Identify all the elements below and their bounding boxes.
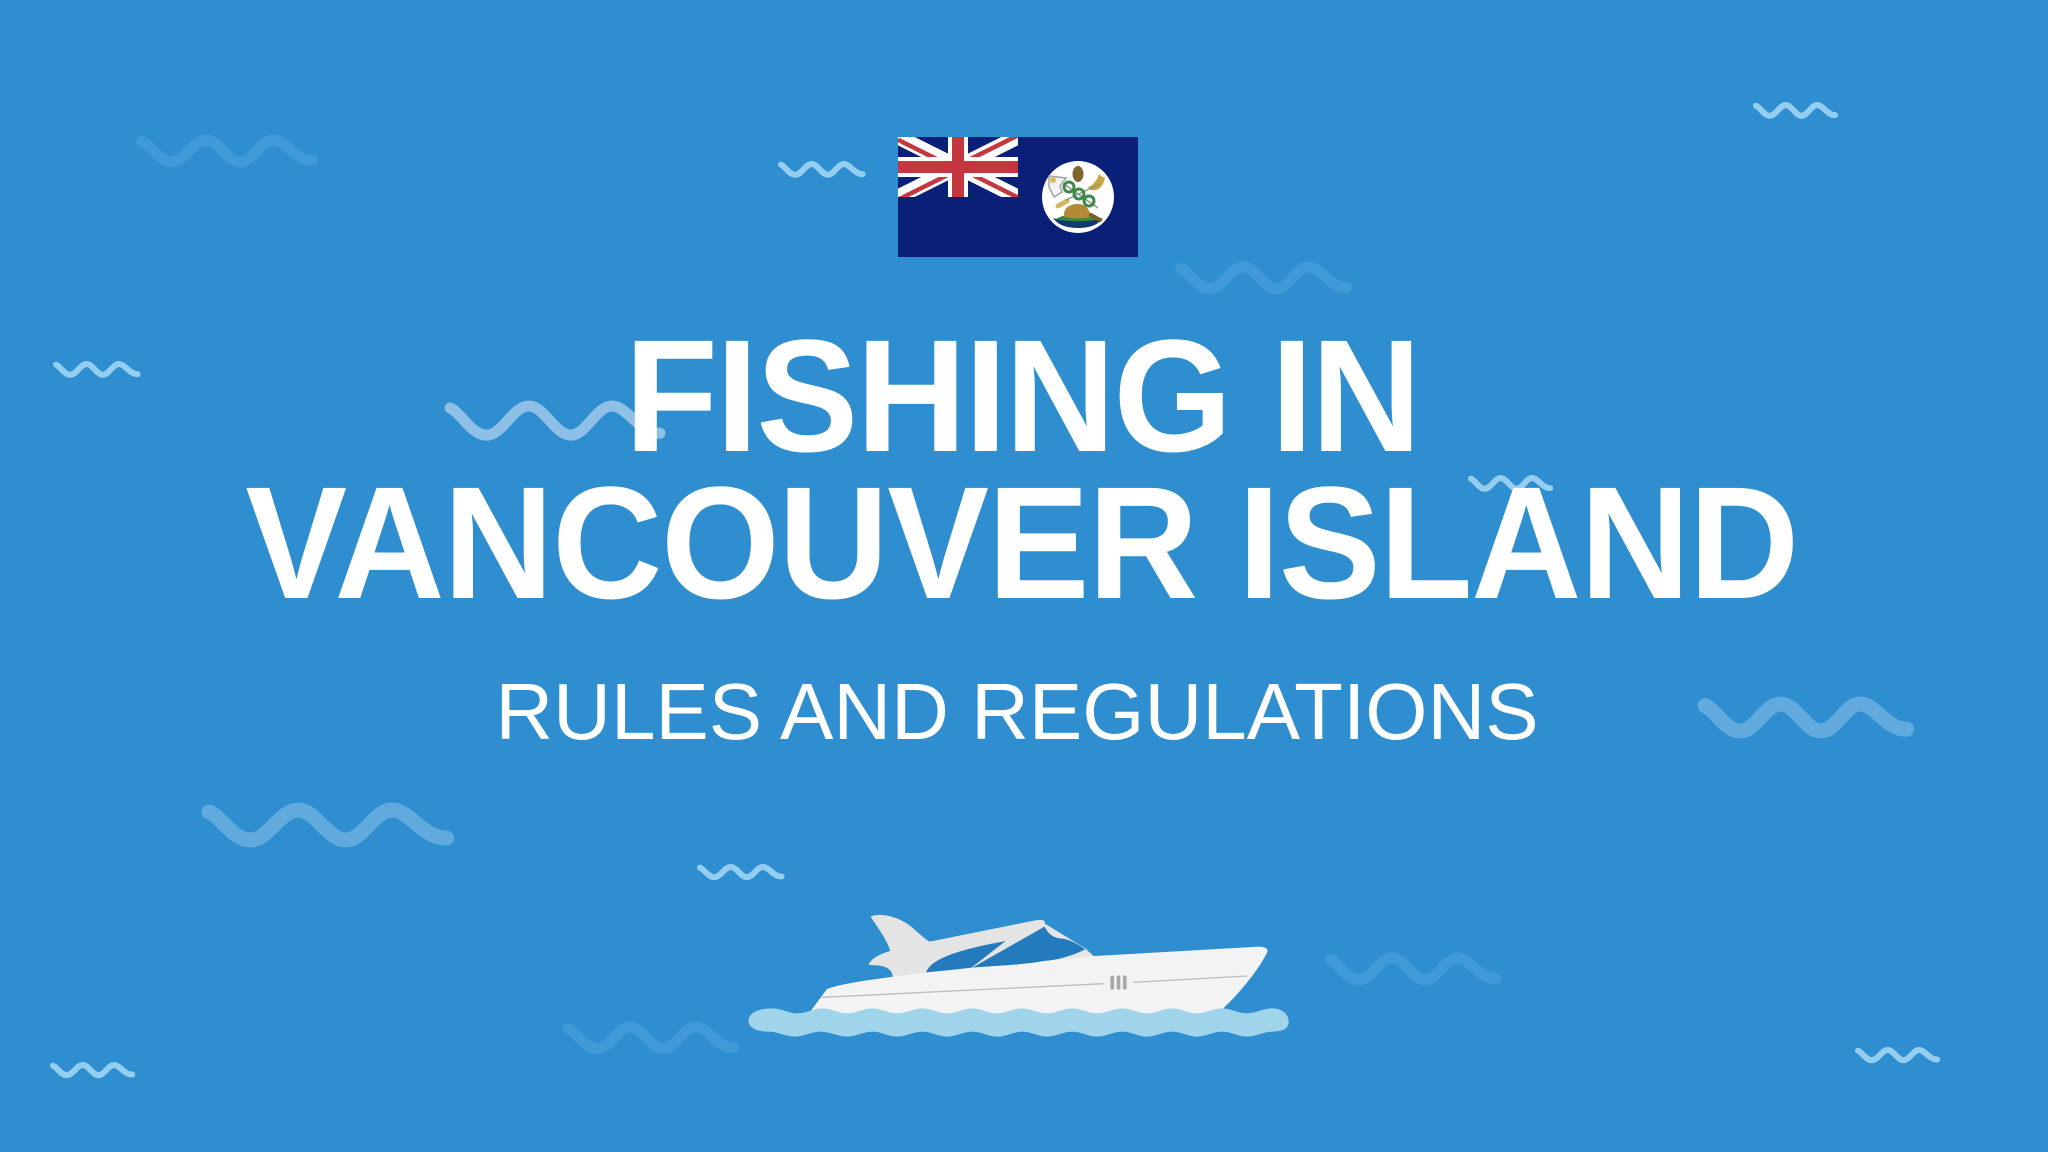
- wave: small bottom right: [1858, 1050, 1937, 1060]
- wave: small behind title right: [1471, 478, 1550, 489]
- water band: [748, 1008, 1289, 1037]
- boat arch and fin: [869, 915, 1096, 978]
- title: VANCOUVER ISLAND: [245, 454, 1798, 633]
- wave: small lower centre: [700, 867, 782, 877]
- wave: medium lower left: [209, 810, 447, 840]
- hull stripe: [822, 976, 1247, 997]
- flag of British Columbia colony: [898, 135, 1138, 257]
- subtitle: RULES AND REGULATIONS: [495, 667, 1539, 756]
- icon: union jack: [898, 135, 1018, 200]
- wave: small left: [56, 364, 138, 375]
- title: FISHING IN: [625, 307, 1419, 486]
- wave: faint below flag: [1181, 267, 1347, 289]
- boat windows: [926, 941, 1006, 972]
- wave: medium right: [1705, 704, 1907, 731]
- wave: light behind title: [450, 406, 660, 435]
- wave: faint right of boat: [1330, 958, 1496, 980]
- wave: small top right: [1756, 105, 1835, 116]
- illustration: boat on water: [748, 915, 1289, 1037]
- icon: badge emblem: [1042, 161, 1114, 233]
- boat hull: [804, 947, 1268, 1020]
- hull vents: [1112, 977, 1125, 988]
- wave: small top centre: [781, 164, 863, 175]
- wave: faint left of boat: [568, 1027, 734, 1049]
- wave: small bottom left: [53, 1065, 132, 1075]
- wave: faint top left: [142, 140, 312, 162]
- title: [245, 307, 1798, 633]
